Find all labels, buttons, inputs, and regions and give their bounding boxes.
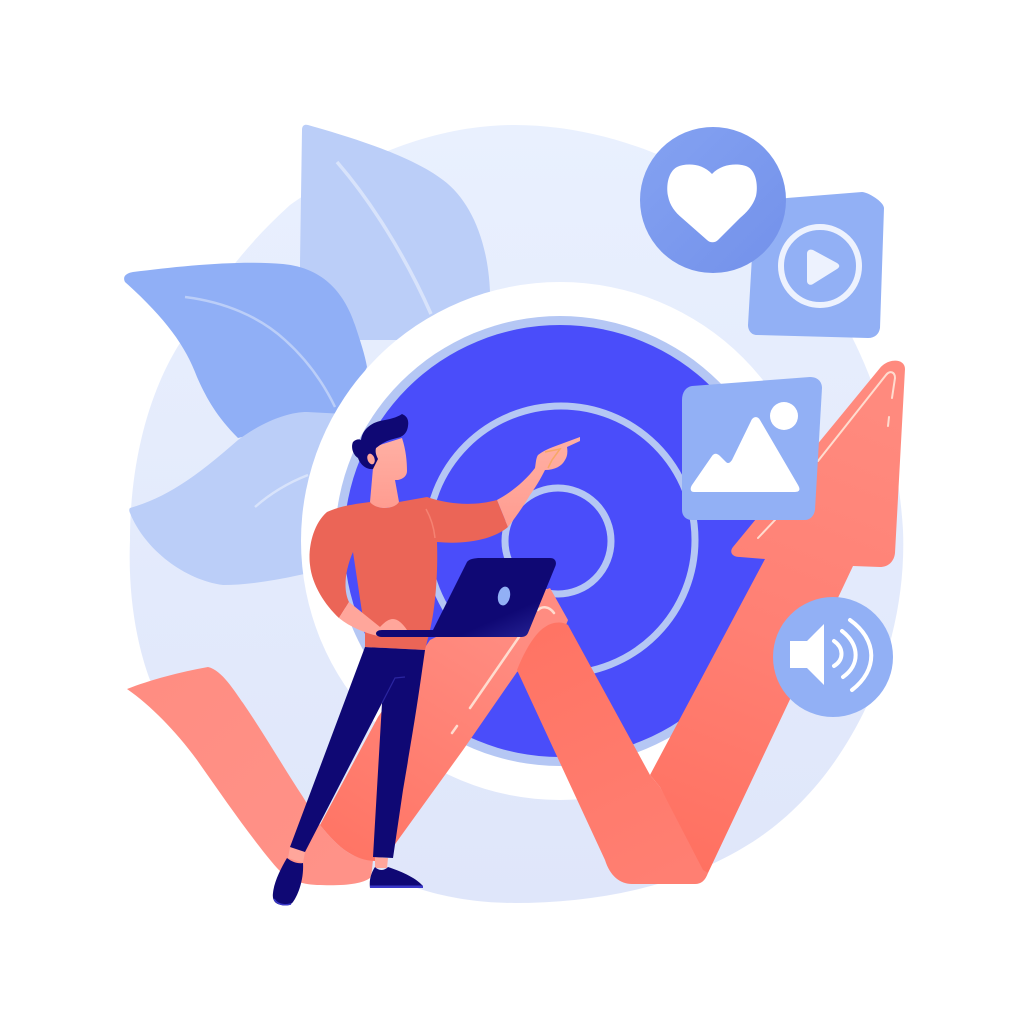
leaf: left bbox=[124, 263, 367, 438]
ear bbox=[366, 453, 376, 465]
ankles bbox=[288, 847, 388, 868]
target: concentric circles bbox=[301, 282, 819, 800]
ribbon: first rise with dark fold bbox=[320, 588, 568, 861]
icon: heart badge bbox=[640, 127, 786, 273]
leaves bbox=[124, 125, 490, 585]
neck and face bbox=[369, 438, 407, 508]
icon: speaker badge bbox=[773, 597, 893, 717]
man with laptop bbox=[273, 414, 580, 906]
pointing arm bbox=[497, 437, 580, 527]
trousers bbox=[290, 647, 425, 858]
hand on hip bbox=[339, 602, 407, 636]
rising arrow ribbon bbox=[127, 361, 905, 885]
laptop bbox=[376, 558, 556, 637]
feet bbox=[273, 858, 423, 906]
ribbon: left fold bbox=[127, 667, 373, 885]
background blob bbox=[130, 125, 903, 903]
ribbon: fall band bbox=[517, 623, 708, 884]
card: video play bbox=[748, 192, 884, 338]
sweater bbox=[310, 497, 508, 650]
leaf: top bbox=[300, 125, 490, 340]
ribbon: rise to arrowhead bbox=[650, 361, 905, 873]
hair bbox=[352, 414, 408, 469]
leaf: lower bbox=[129, 412, 345, 585]
ribbon highlights bbox=[452, 372, 895, 733]
card: image bbox=[682, 377, 822, 520]
